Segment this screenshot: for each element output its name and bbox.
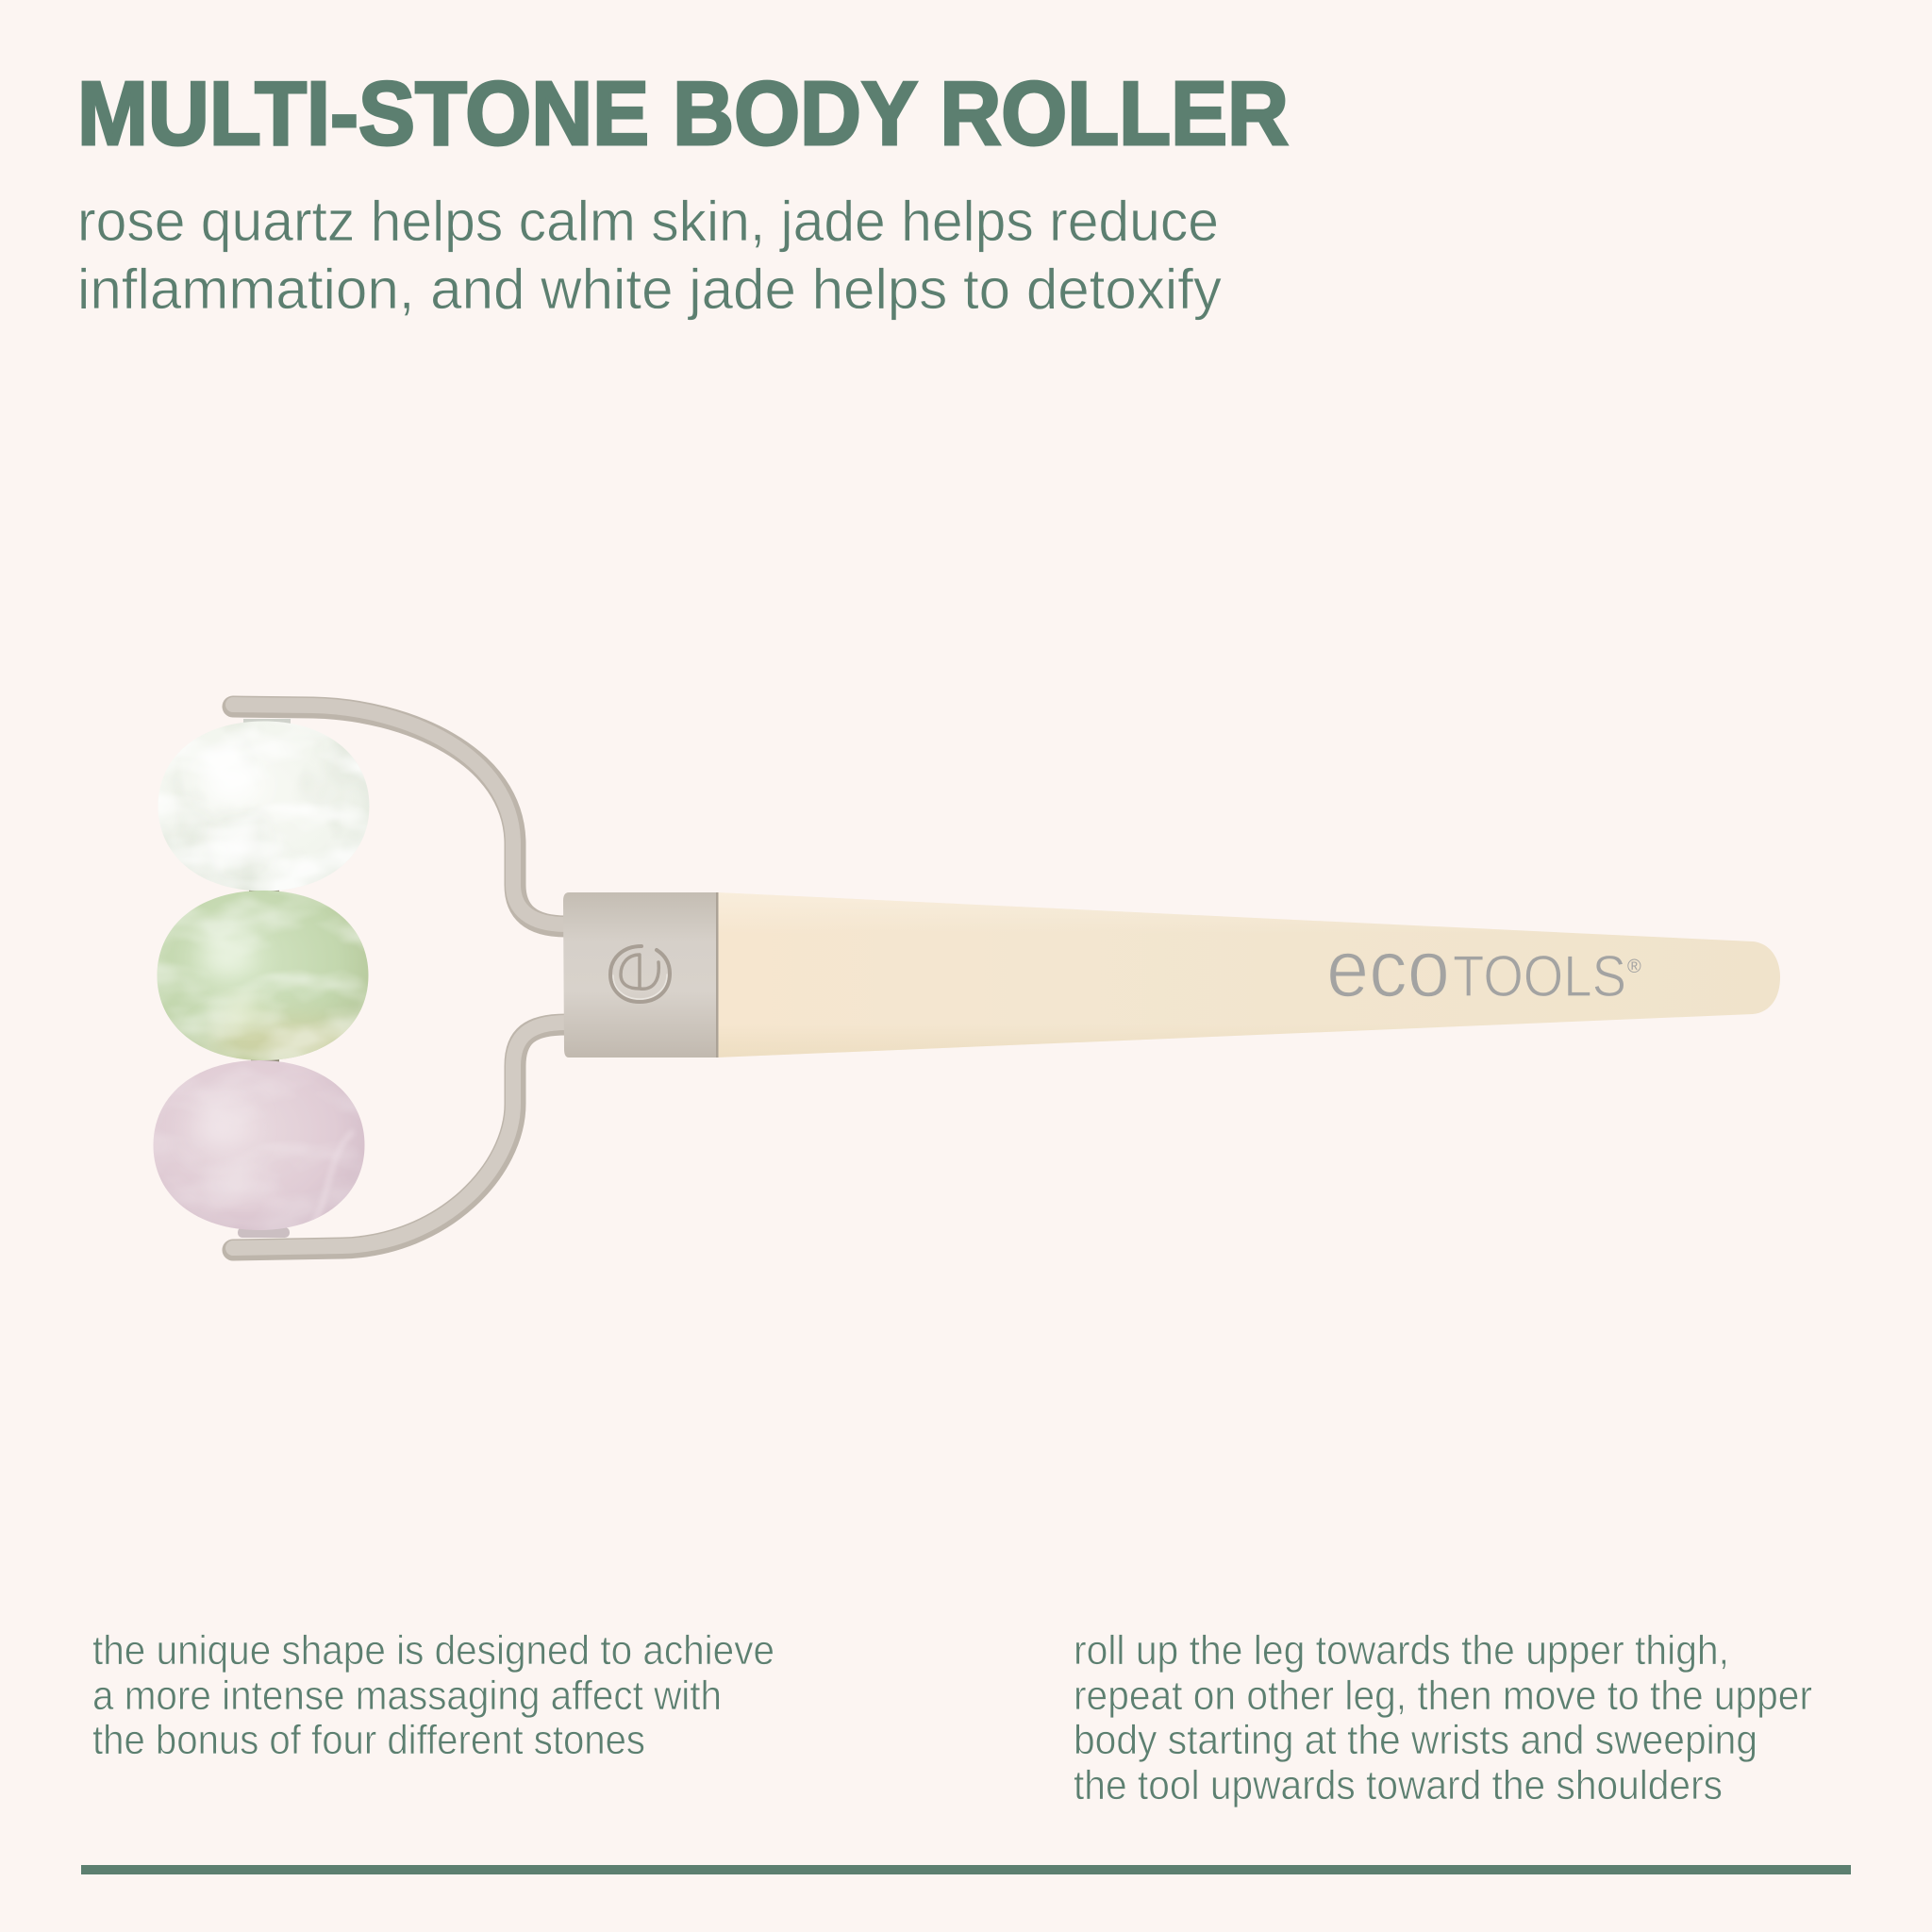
subtitle text block: rose quartz helps calm skin, jade helps reduce xyxy=(77,190,1219,253)
text block: left description: a more intense massaging affect with xyxy=(92,1673,722,1719)
text block: right description: roll up the leg towards the upper thigh, xyxy=(1074,1627,1729,1674)
brand logo: ecotools: TOOLS xyxy=(1453,944,1626,1009)
brand logo: ecotools: eco xyxy=(1326,924,1450,1014)
subtitle text block xyxy=(77,190,1222,321)
title: MULTI-STONE BODY ROLLER xyxy=(77,63,1289,164)
wooden handle xyxy=(717,892,1780,1058)
metal collar xyxy=(563,892,719,1058)
product: body roller xyxy=(151,705,1780,1250)
metal frame xyxy=(233,705,566,1250)
text block: right description: body starting at the wrists and sweeping xyxy=(1074,1717,1757,1763)
stone pins xyxy=(238,719,291,1238)
subtitle text block: inflammation, and white jade helps to detoxify xyxy=(77,258,1222,321)
text block: right description: the tool upwards toward the shoulders xyxy=(1074,1762,1723,1808)
text block: right description: repeat on other leg, then move to the upper xyxy=(1074,1673,1812,1719)
stone: green jade xyxy=(155,886,375,1065)
text block: right description xyxy=(1074,1627,1812,1808)
icon: embossed e logo xyxy=(610,946,670,1002)
brand logo: ecotools: ® xyxy=(1627,957,1641,977)
footer rule xyxy=(81,1865,1851,1874)
brand logo: ecotools xyxy=(1326,924,1641,1014)
text block: left description: the bonus of four different stones xyxy=(92,1717,645,1763)
text block: left description xyxy=(92,1627,774,1763)
text block: left description: the unique shape is designed to achieve xyxy=(92,1627,774,1674)
stone: rose quartz xyxy=(151,1056,368,1235)
stone: white jade xyxy=(155,717,372,896)
